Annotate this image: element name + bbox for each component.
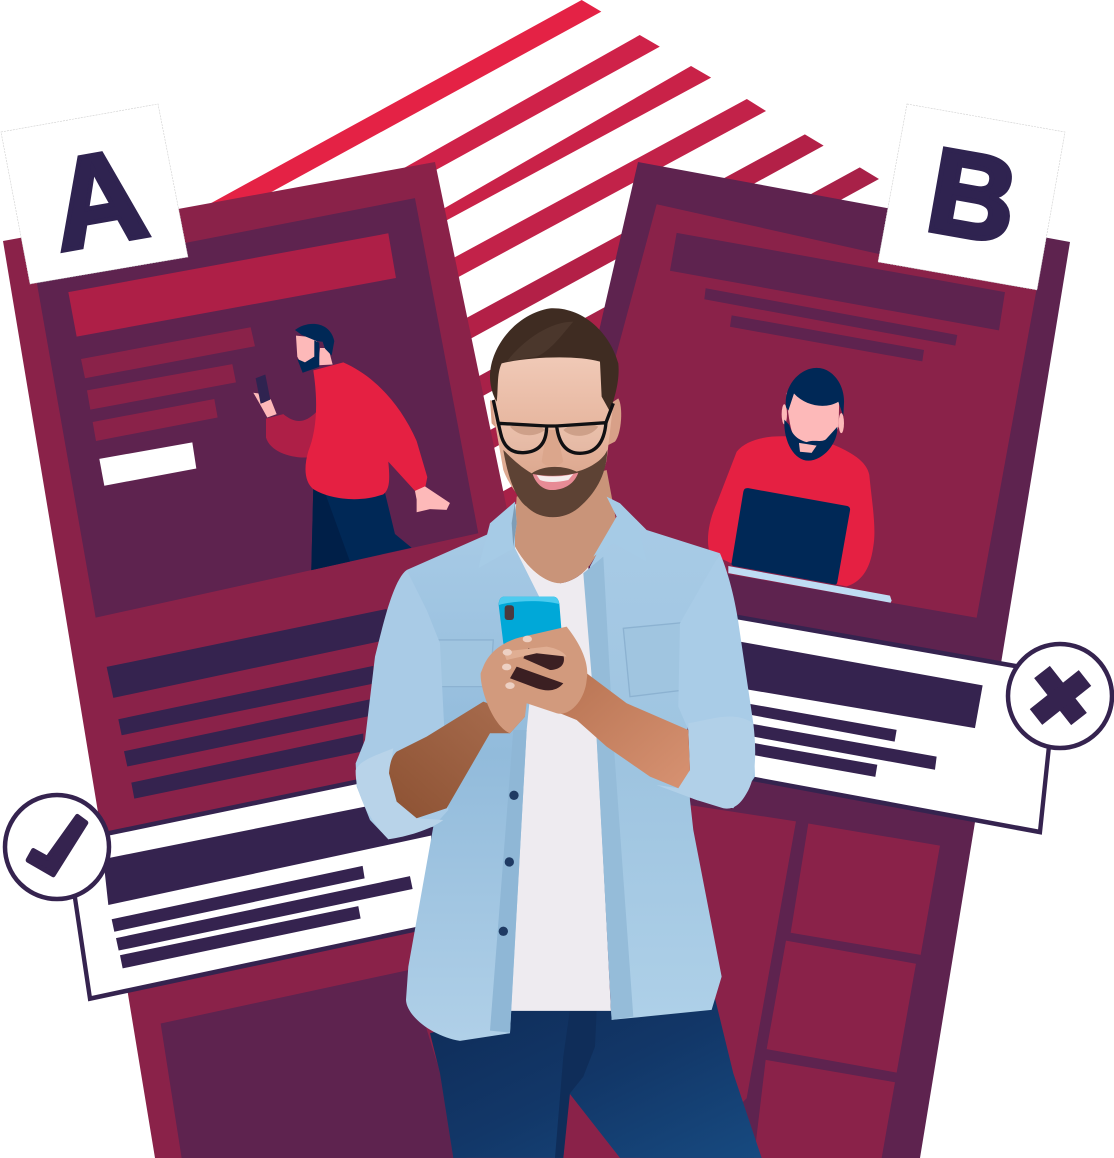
jeans: [430, 998, 762, 1158]
callout A text lines: [103, 794, 434, 968]
page A inner panel: [35, 198, 478, 618]
neck: [513, 470, 617, 583]
page A text lines: [81, 327, 255, 441]
right cuff: [657, 717, 755, 809]
panel: page A: [3, 162, 640, 1158]
page A big content block: [107, 609, 390, 799]
right forearm: [560, 673, 690, 788]
label: A: A: [40, 121, 157, 279]
pockets: [437, 623, 685, 697]
icon: check mark: [5, 795, 109, 899]
page A lower panel: [161, 970, 467, 1158]
left sleeve: [356, 570, 448, 839]
plackets: [490, 730, 527, 1033]
ears: [490, 400, 497, 428]
label: A: [1, 104, 188, 284]
left forearm: [389, 702, 525, 818]
page B inner panel: [580, 204, 1037, 618]
man holding phone: [356, 308, 762, 1158]
hands: [481, 627, 587, 733]
label: B: B: [918, 123, 1027, 270]
figure: man with phone: [253, 324, 450, 570]
page A button: [99, 442, 196, 486]
callout: loser B: [713, 613, 1112, 832]
right sleeve: [657, 553, 755, 808]
face: [493, 350, 613, 518]
page A header bar: [68, 233, 396, 337]
collars: [478, 502, 517, 568]
hair: [490, 308, 619, 412]
ground between legs: [540, 1080, 640, 1158]
panel: page B: [560, 162, 1070, 1158]
phone: [499, 597, 563, 690]
callout: winner A: [5, 766, 434, 999]
buttons: [499, 791, 519, 936]
beard: [503, 450, 607, 517]
background stripes: [196, 0, 879, 524]
t-shirt: [510, 547, 611, 1011]
nose and cheek shading: [542, 430, 563, 467]
left cuff: [356, 748, 443, 839]
figure: man at laptop: [708, 368, 892, 603]
glasses: [493, 400, 613, 453]
icon: cross mark: [1008, 644, 1112, 748]
page B text lines: [704, 288, 957, 361]
page B header bar: [670, 233, 1005, 330]
shirt left panel: [406, 520, 540, 1041]
page B lower panels: [687, 805, 940, 1158]
shirt right panel: [590, 517, 722, 1020]
label: B: [878, 104, 1065, 290]
callout B text lines: [730, 640, 983, 777]
smile: [533, 473, 578, 490]
